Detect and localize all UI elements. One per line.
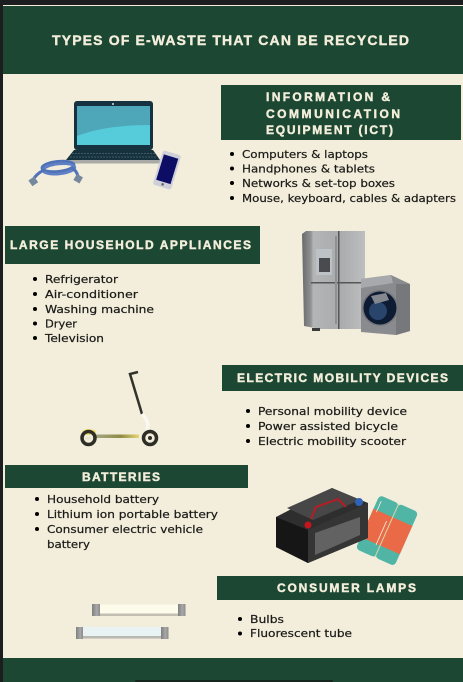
icon: fluorescent tube, warm [92,604,186,616]
heading: batteries: BATTERIES [82,470,160,484]
list: appliances: Refrigerator [45,273,119,286]
panel: ICT [221,85,461,205]
list: lamps: Fluorescent tube [250,627,352,640]
list: batteries: Consumer electric vehicle [47,523,203,536]
list: ICT items: Mouse, keyboard, cables & adapters [242,192,456,205]
icon: smartphone [153,150,181,190]
heading: electric mobility devices [222,365,463,391]
heading: ICT [221,85,461,140]
heading: batteries [5,465,248,488]
list: appliances: Dryer [45,318,78,330]
icon: refrigerator and washing machine [302,231,410,335]
list: batteries: Household battery [47,493,160,506]
list: mobility devices: Power assisted bicycle [258,420,398,433]
title banner [3,6,463,74]
list: mobility devices: Electric mobility scooter [258,435,407,448]
heading: ICT: INFORMATION & [266,90,390,104]
list: ICT items: Handphones & tablets [242,162,375,176]
title: TYPES OF E-WASTE THAT CAN BE RECYCLED [52,32,409,48]
list: lamps: Bulbs [250,613,284,626]
panel: consumer lamps [217,576,463,640]
footer band [3,658,463,682]
list: mobility devices: Personal mobility device [258,405,407,418]
heading: ICT: EQUIPMENT (ICT) [266,123,393,137]
icon: washing machine [361,275,410,335]
icon: car battery [276,488,368,563]
list: lamps [238,613,352,640]
heading: consumer lamps: CONSUMER LAMPS [277,581,416,595]
heading: large household appliances [5,226,260,264]
list: appliances: Television [44,332,104,345]
list: ICT items: Networks & set-top boxes [242,177,395,190]
list: mobility devices [246,405,407,448]
heading: ICT: COMMUNICATION [266,107,400,121]
list: batteries [35,493,219,551]
list: appliances [33,273,154,345]
list: appliances: Air-conditioner [45,288,139,301]
list: batteries: battery [47,538,91,551]
icon: laptop, phone and network cable [28,101,181,190]
icon: electric scooter [82,372,156,444]
icon: laptop [66,101,160,164]
heading: large household appliances: LARGE HOUSEHOLD APPLIANCES [10,238,251,252]
panel: batteries [5,465,248,551]
heading: electric mobility devices: ELECTRIC MOBILITY DEVICES [237,371,448,385]
panel: electric mobility devices [222,365,463,448]
icon: cylindrical cells [356,495,418,566]
heading: consumer lamps [217,576,463,600]
icon: fluorescent tube, cool [76,627,168,639]
icon: car battery and cells [276,488,418,566]
list: appliances: Washing machine [45,303,154,316]
panel: large household appliances [5,226,260,345]
icon: refrigerator [302,231,365,331]
list: ICT items [230,148,456,205]
icon: network cable [28,160,83,186]
list: ICT items: Computers & laptops [242,148,368,161]
list: batteries: Lithium ion portable battery [47,508,219,521]
